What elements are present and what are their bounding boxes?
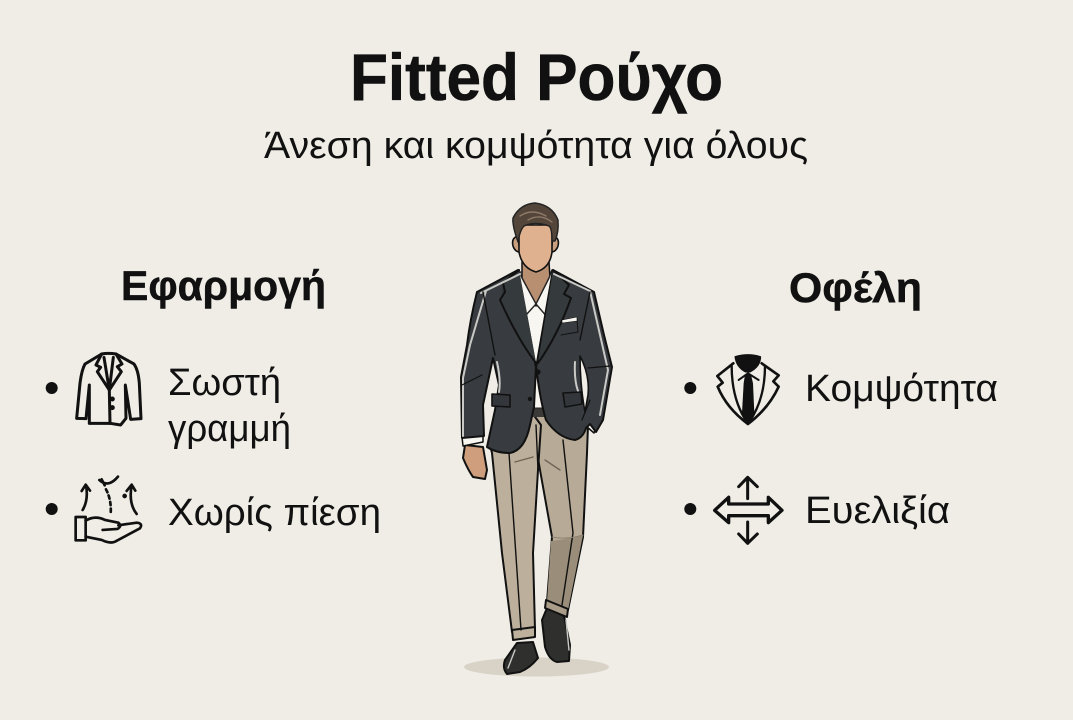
panel: benefits (Οφέλη): [684, 264, 998, 543]
shirt collar: [518, 270, 553, 318]
blazer: [461, 270, 612, 453]
front shoe: [504, 642, 538, 674]
central figure: man in fitted blazer and chinos: [461, 203, 612, 676]
panel: fit (Εφαρμογή): [46, 262, 381, 543]
neck: [522, 262, 550, 306]
label: Σωστή γραμμή: γραμμή: [168, 408, 291, 450]
cuffs: [462, 434, 483, 446]
subtitle: Άνεση και κομψότητα για όλους: [264, 125, 808, 167]
buttons: [535, 369, 541, 375]
label: Κομψότητα: Κομψότητα: [805, 368, 998, 410]
ground shadow: [464, 658, 609, 676]
gap between torso and right arm: [580, 356, 588, 412]
shirt: [518, 272, 553, 408]
trousers: [490, 410, 588, 640]
bullet: flexibility: [684, 503, 696, 515]
ears: [513, 236, 558, 252]
belt: [532, 407, 549, 417]
bullet: no pressure: [46, 503, 58, 515]
back shoe: [542, 608, 570, 662]
bullet: elegance: [684, 382, 696, 394]
icon: blazer: [77, 353, 141, 425]
label: Ευελιξία: Ευελιξία: [805, 490, 950, 532]
label: Χωρίς πίεση: Χωρίς πίεση: [168, 492, 381, 534]
icon: hand with upward arrows: [76, 477, 141, 543]
title: Fitted Ρούχο: [350, 40, 723, 114]
label: Σωστή γραμμή: Σωστή: [168, 362, 281, 404]
hair: [513, 203, 558, 242]
heading: Οφέλη: Οφέλη: [789, 264, 922, 311]
lapels: [500, 270, 571, 363]
pocket flaps: [492, 394, 510, 407]
face: [519, 225, 552, 272]
bullet: correct line: [46, 382, 58, 394]
icon: suit and tie: [717, 355, 779, 424]
icon: four-way arrows: [715, 477, 782, 543]
heading: Εφαρμογή: Εφαρμογή: [121, 262, 326, 309]
head: [513, 203, 558, 272]
shoe highlights: [508, 620, 569, 668]
left hand: [463, 445, 487, 479]
pocket square: [562, 317, 577, 323]
